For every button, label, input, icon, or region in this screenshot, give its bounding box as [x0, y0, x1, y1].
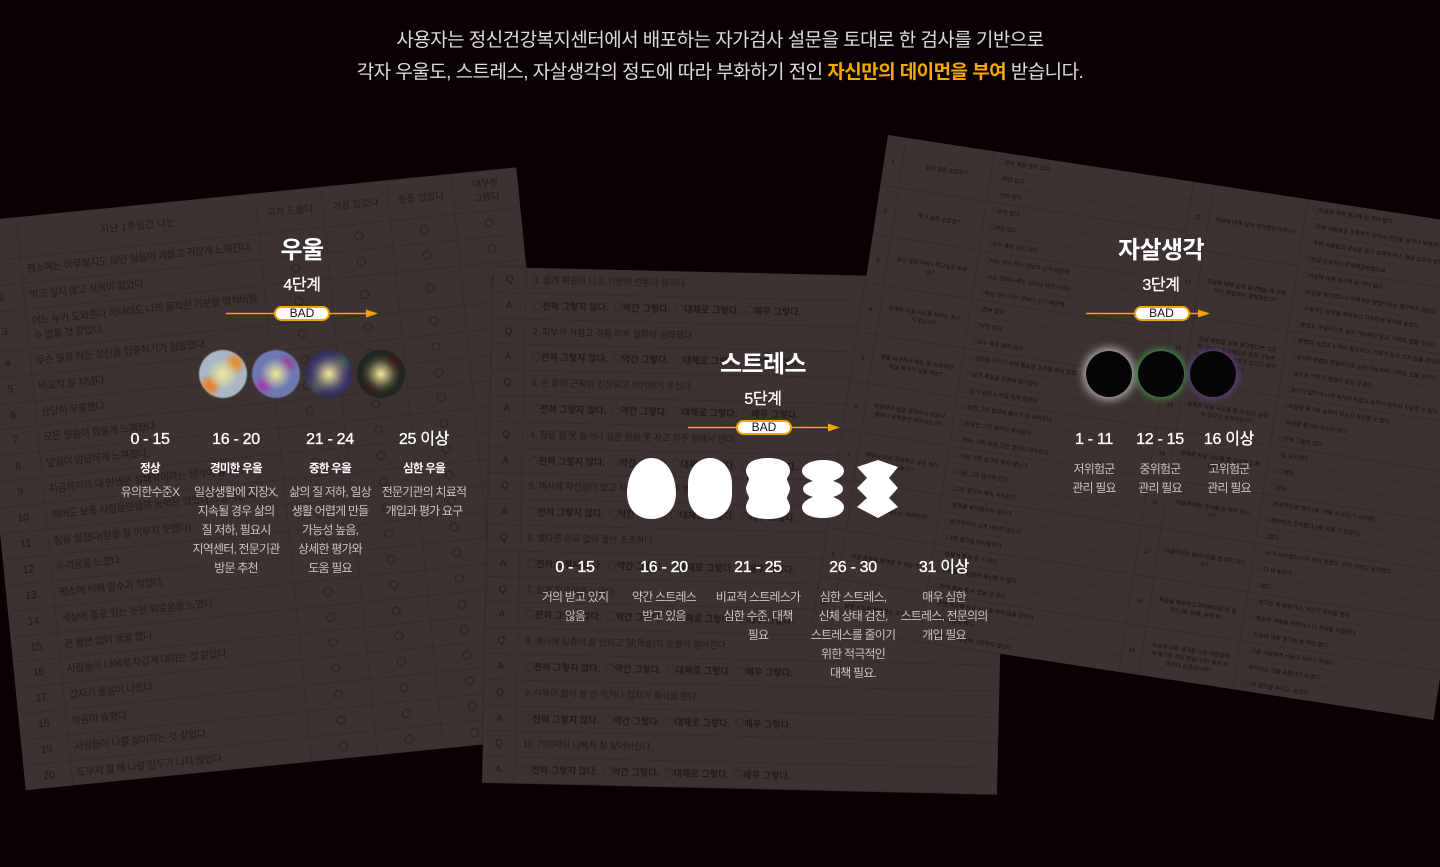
- icon: sphere normal: [199, 350, 247, 398]
- panel: suicidal ideation questionnaire sheet: 자살하려는 글(유서)을 쓴 적이 있는가?: [1164, 547, 1246, 568]
- panel: suicidal ideation questionnaire sheet: ◯주변 때문에 자살 시도를 하지 않을 것이다: [931, 599, 1034, 621]
- panel: suicidal ideation questionnaire sheet: ◯전혀 통제 할 수 없을 것 같다: [934, 582, 1006, 600]
- panel: stress questionnaire sheet: Q: [499, 584, 507, 595]
- panel: stress questionnaire sheet: A: [497, 661, 504, 672]
- panel: depression questionnaire sheet: 16: [32, 666, 45, 679]
- panel: stress questionnaire sheet: A: [500, 558, 507, 569]
- icon: shape egg: [627, 458, 676, 519]
- panel: depression questionnaire sheet: 5: [7, 383, 14, 396]
- score column: 0-15: 않음: [565, 609, 585, 623]
- score column: 21-25: 21 - 25: [734, 559, 782, 576]
- panel: depression questionnaire sheet: 상당히 우울했다.: [41, 401, 107, 418]
- panel: suicidal ideation questionnaire sheet: 8: [839, 501, 843, 508]
- panel: suicidal ideation questionnaire sheet: 살고 싶은 이유 / 죽고싶은 이유는?: [896, 255, 968, 276]
- icon: shape deep bumps: [802, 460, 844, 518]
- score column: 0-15: [121, 431, 180, 499]
- panel: suicidal ideation questionnaire sheet: 13: [1175, 344, 1182, 351]
- panel: suicidal ideation questionnaire sheet: ◯방법이 시간과 노력이 필요하고, 기회가 쉽게 오지 않을 것이다: [1292, 337, 1440, 366]
- score column: 16+: 고위험군: [1209, 462, 1249, 476]
- panel: depression questionnaire sheet: 14: [27, 615, 40, 628]
- panel: stress questionnaire sheet: A: [496, 713, 503, 724]
- panel: suicidal ideation questionnaire sheet: 자살에 대한 준비를 한 적이 있는가?: [1175, 498, 1250, 519]
- panel: suicidal ideation questionnaire sheet: 1: [891, 158, 895, 166]
- panel: depression questionnaire sheet: 12: [22, 563, 34, 576]
- panel: stress questionnaire sheet: Q: [502, 429, 510, 440]
- panel: stress questionnaire sheet: ◯전혀 그렇지 않다. ◯약간 그렇다. ◯대체로 그렇다. ◯매우 그렇다.: [533, 301, 801, 317]
- panel: suicidal ideation questionnaire sheet: 자살하고 싶은 생각이나 소망이 얼마나 오랫동안 지속되는가?: [873, 402, 946, 427]
- panel: suicidal ideation questionnaire sheet: ◯생명을 건지기 위해 필요한 조치를 하지 않겠다: [969, 354, 1082, 378]
- score column: 21-25: 비교적 스트레스가: [716, 590, 800, 604]
- panel: suicidal ideation questionnaire sheet: 9: [831, 550, 835, 557]
- panel: suicidal ideation questionnaire sheet: ◯모두 혹은 많이 있다: [971, 338, 1023, 352]
- panel: stress questionnaire sheet: ◯전혀 그렇지 않다. ◯약간 그렇다. ◯대체로 그렇다. ◯매우 그렇다.: [525, 662, 793, 678]
- score column: 1-11: 저위험군: [1074, 462, 1114, 476]
- panel: depression questionnaire sheet: 4: [4, 357, 11, 370]
- panel: suicidal ideation questionnaire sheet: ◯그런 생각을 받아들인다: [941, 533, 1002, 549]
- score column: 1-11: [1072, 431, 1116, 495]
- panel: stress questionnaire sheet: ◯전혀 그렇지 않다. ◯약간 그렇다. ◯대체로 그렇다. ◯매우 그렇다.: [523, 713, 792, 730]
- panel: suicidal ideation questionnaire sheet: ◯통제할 수 있을지 확신할 수 없다: [936, 566, 1017, 585]
- score column: 26-30: 위한 적극적인: [821, 647, 885, 661]
- panel: depression questionnaire sheet: 대부분: [472, 177, 499, 191]
- badge: BAD: BAD: [290, 306, 314, 320]
- panel: suicidal ideation questionnaire sheet: 5: [861, 354, 865, 361]
- score column: 26-30: 대책 필요.: [830, 666, 876, 680]
- score column: 21-24: [289, 431, 372, 575]
- panel: stress questionnaire sheet: Q: [506, 274, 514, 285]
- panel: depression questionnaire sheet: 적어도 보통 사람들만큼의 능력은 있었다고 생각한다.: [51, 490, 257, 521]
- score column: 0-15: [542, 559, 608, 623]
- score column: 16-20: 방문 추천: [214, 561, 258, 575]
- arrow: depression severity: [226, 310, 378, 318]
- panel: stress questionnaire sheet: ◯전혀 그렇지 않다. ◯약간 그렇다. ◯대체로 그렇다. ◯매우 그렇다.: [528, 507, 797, 523]
- panel: depression questionnaire sheet: 수 없을 것 같았다.: [33, 324, 104, 342]
- panel: depression questionnaire sheet: 3: [1, 326, 8, 338]
- panel: depression questionnaire sheet: 평소에 비해 말수가 적었다.: [59, 577, 165, 599]
- panel: stress questionnaire sheet: Q: [496, 687, 504, 698]
- score column: 16-20: 지역센터, 전문기관: [192, 542, 280, 556]
- panel: stress questionnaire sheet: ◯전혀 그렇지 않다. ◯약간 그렇다. ◯대체로 그렇다. ◯매우 그렇다.: [532, 352, 800, 369]
- score column: 21-24: 21 - 24: [306, 431, 354, 448]
- panel: suicidal ideation questionnaire sheet: ◯한동안 그런 생각이 계속된다: [959, 419, 1031, 437]
- panel: suicidal ideation questionnaire sheet: ◯삶과 죽음을 운명에 맡기겠다: [966, 370, 1039, 388]
- score column: 31+: 매우 심한: [922, 590, 966, 604]
- level count: suicidal ideation: 3단계: [1142, 277, 1180, 294]
- panel: stress questionnaire sheet: 6. 별다른 이유 없이 불안 초조하다.: [528, 533, 655, 546]
- panel: suicidal ideation questionnaire sheet: ◯없다: [1255, 581, 1272, 590]
- panel: suicidal ideation questionnaire sheet: ◯잘 모르겠다: [1275, 451, 1309, 462]
- panel: depression questionnaire sheet: 지난 1주일간 나는: [100, 218, 176, 236]
- panel: suicidal ideation questionnaire sheet: ◯용기가 없어서 나약 해져서 두렵고 능력이 없어서 자살할 수 없다: [1285, 386, 1438, 416]
- score column: 12-15: 관리 필요: [1138, 481, 1182, 495]
- score column: 25+: [382, 430, 466, 518]
- panel: suicidal ideation questionnaire sheet: 자살에 대해 깊게 생각했을 때 구체적인 방법까지 계획했는가?: [1206, 278, 1287, 303]
- panel: suicidal ideation questionnaire sheet: ◯확실한 계획을 세웠거나 다 정리를 마쳤었다: [1250, 614, 1356, 637]
- score column: 16-20: 질 저하, 필요시: [201, 523, 271, 537]
- score column: 21-24: 가능성 높음,: [302, 523, 358, 537]
- panel: suicidal ideation questionnaire sheet: ◯쓰기 시작했으나 다 쓰지 못했다. 단지 쓰려고 생각했다: [1260, 549, 1391, 575]
- panel: suicidal ideation questionnaire sheet: ◯가끔 그런 생각이 든다: [951, 468, 1009, 483]
- score column: 16-20: 경미한 우울: [210, 463, 262, 475]
- score column: 0-15: 정상: [140, 463, 160, 475]
- panel: suicidal ideation questionnaire sheet: ◯그렇다: [1272, 467, 1294, 477]
- panel: stress questionnaire sheet: [482, 267, 1009, 795]
- icons: white morphing shapes: [627, 458, 898, 519]
- arrow: stress severity: [688, 424, 840, 432]
- panel: stress questionnaire sheet: A: [495, 764, 502, 775]
- score column: 1-11: 1 - 11: [1075, 431, 1113, 448]
- panel: stress questionnaire sheet: ◯전혀 그렇지 않다. ◯약간 그렇다. ◯대체로 그렇다. ◯매우 그렇다.: [526, 610, 794, 626]
- panel: stress questionnaire sheet: 9. 식욕이 없어 잘 안 먹거나 갑자기 폭식을 한다.: [524, 688, 699, 702]
- panel: depression questionnaire sheet: 20: [43, 769, 55, 782]
- panel: stress questionnaire sheet: A: [506, 300, 513, 311]
- score column: 25+: 전문기관의 치료적: [382, 485, 466, 499]
- score column: 0-15: 0 - 15: [555, 559, 595, 576]
- panel: suicidal ideation questionnaire sheet: ◯충분히 통제 할 수 있다: [939, 550, 998, 565]
- score column: 26-30: [811, 559, 895, 680]
- score column: 26-30: 심한 스트레스,: [820, 590, 886, 604]
- panel: suicidal ideation questionnaire sheet: ◯약간 있다: [996, 174, 1025, 185]
- panel: stress questionnaire sheet: A: [498, 610, 505, 621]
- panel: depression questionnaire sheet: 17: [35, 692, 47, 705]
- score column: 21-25: 필요: [748, 628, 768, 642]
- panel: depression questionnaire sheet: 6: [9, 409, 16, 421]
- panel: stress questionnaire sheet: 4. 잠을 잘 못 들거나 깊은 잠을 못 자고 자주 잠에서 깬다.: [530, 430, 736, 444]
- panel: suicidal ideation questionnaire sheet: 자살에 대해 깊게 생각했던 이유는?: [1215, 216, 1297, 235]
- panel: suicidal ideation questionnaire sheet: ◯완전하게 준비했다 (예: 약을 다 모았다): [1265, 516, 1361, 537]
- panel: suicidal ideation questionnaire sheet: 자살 충동을 통제할 수 있는가?: [851, 553, 922, 570]
- score column: 16-20: 받고 있음: [642, 609, 686, 623]
- score column: 1-11: 관리 필요: [1072, 481, 1116, 495]
- panel: suicidal ideation questionnaire sheet: ◯생각한 방법이 현실적으로 실천 가능하며, 기회도 있을 것이다: [1290, 353, 1437, 382]
- panel: suicidal ideation questionnaire sheet: 실제로 자살 시도를 할 것이라고 확신하는가?: [1180, 449, 1260, 472]
- panel: stress questionnaire sheet: Q: [501, 481, 509, 492]
- panel: depression questionnaire sheet: 잠을 설쳤다(잠을 잘 이루지 못했다).: [53, 522, 194, 547]
- panel: suicidal ideation questionnaire sheet: ◯모두 혹은 많이 있다: [986, 240, 1038, 254]
- heading: suicidal ideation: 자살생각: [1118, 237, 1204, 264]
- panel: depression questionnaire sheet: 종종 있었다: [397, 191, 445, 206]
- panel: stress questionnaire sheet: ◯전혀 그렇지 않다. ◯약간 그렇다. ◯대체로 그렇다. ◯매우 그렇다.: [522, 765, 791, 781]
- panel: depression questionnaire sheet: 8: [14, 460, 21, 473]
- score column: 16-20: 약간 스트레스: [632, 590, 696, 604]
- score column: 26-30: 신체 상태 검진,: [818, 609, 888, 623]
- panel: depression questionnaire sheet: 15: [30, 640, 42, 654]
- panel: suicidal ideation questionnaire sheet: ◯사는 것이나 죽는 것이나 마찬가지다: [981, 272, 1071, 293]
- score column: 25+: 개입과 평가 요구: [386, 504, 462, 518]
- panel: suicidal ideation questionnaire sheet: ◯자살할 용기와 자신이 있다: [1280, 418, 1347, 435]
- score column: 0-15: 유의한수준X: [121, 485, 179, 499]
- icon: shape soft bumps: [746, 458, 790, 519]
- heading: stress: 스트레스: [720, 351, 806, 378]
- panel: suicidal ideation questionnaire sheet: ◯가족, 종교 때문에 고민하지 않는다: [926, 631, 1012, 651]
- heading: depression: 우울: [281, 237, 323, 264]
- panel: suicidal ideation questionnaire sheet: 3: [876, 256, 880, 263]
- panel: suicidal ideation questionnaire sheet: ◯전혀 그렇지 않다: [1277, 435, 1323, 448]
- panel: suicidal ideation questionnaire sheet: ◯전혀 없다: [976, 305, 1005, 316]
- score column: 16-20: 일상생활에 지장X,: [194, 485, 278, 499]
- panel: suicidal ideation questionnaire sheet: ◯행동을 받아들이지 않는다: [946, 501, 1012, 517]
- score column: 21-25: 심한 수준, 대책: [723, 609, 793, 623]
- panel: suicidal ideation questionnaire sheet: 2: [883, 207, 888, 214]
- score column: 26-30: 스트레스를 줄이기: [811, 628, 895, 642]
- score column: 16+: 16 이상: [1204, 431, 1254, 448]
- panel: suicidal ideation questionnaire sheet: 15: [1158, 450, 1166, 457]
- panel: depression questionnaire sheet: 세상에 홀로 있는 듯한 외로움을 느꼈다.: [61, 598, 215, 624]
- badge: BAD: BAD: [1149, 306, 1174, 320]
- panel: stress questionnaire sheet: 5. 매사에 자신감이 없고 자기 비하를 자주 한다.: [529, 481, 701, 495]
- panel: depression questionnaire sheet: 먹고 싶지 않고 식욕이 없었다.: [29, 279, 146, 301]
- panel: suicidal ideation questionnaire sheet: 명을 되구하려 하는 등 소극적인 자살 욕구가 낮을 때는?: [880, 353, 954, 377]
- score column: 21-25: [716, 559, 801, 642]
- panel: suicidal ideation questionnaire sheet: 14: [1166, 401, 1173, 408]
- panel: depression questionnaire sheet: 도무지 뭘 해 나갈 엄두가 나지 않았다.: [77, 753, 224, 779]
- panel: suicidal ideation questionnaire sheet: ◯자살에 대해 생각해 본 적이 없다: [1312, 206, 1393, 225]
- panel: stress questionnaire sheet: Q: [503, 377, 511, 389]
- panel: suicidal ideation questionnaire sheet: ◯전혀 없다: [991, 207, 1020, 218]
- panel: stress questionnaire sheet: A: [503, 403, 510, 414]
- panel: suicidal ideation questionnaire sheet: ◯자살에 대해 생각해 본 적이 없다: [1247, 630, 1328, 649]
- panel: depression questionnaire sheet: 사람들이 나를 싫어하는 것 같았다.: [74, 729, 209, 753]
- panel: stress questionnaire sheet: 3. 온 몸의 근육이 긴장되고 여기저기 쑤신다.: [531, 378, 693, 392]
- icon: shape capsule: [688, 458, 732, 519]
- panel: suicidal ideation questionnaire sheet: ◯양가적이나 크게 개의치 않는다: [944, 517, 1022, 535]
- panel: depression questionnaire sheet: 18: [37, 718, 50, 731]
- panel: suicidal ideation questionnaire sheet: 죽고 싶은 소망은?: [917, 212, 960, 226]
- panel: stress questionnaire sheet: A: [501, 506, 508, 518]
- score column: 16+: [1204, 430, 1254, 495]
- panel: stress questionnaire sheet: ◯전혀 그렇지 않다. ◯약간 그렇다. ◯대체로 그렇다. ◯매우 그렇다.: [529, 455, 798, 472]
- panel: suicidal ideation questionnaire sheet: ◯전혀 없다: [994, 191, 1022, 202]
- level count: stress: 5단계: [744, 391, 782, 408]
- score column: 16+: 관리 필요: [1207, 481, 1251, 495]
- panel: depression questionnaire sheet: [0, 167, 573, 790]
- panel: suicidal ideation questionnaire sheet: ◯거의 그런 생각이 들지 않는다: [954, 452, 1028, 470]
- panel: depression questionnaire sheet: 그랬다: [473, 191, 500, 205]
- score column: 21-24: 생활 어렵게 만들: [292, 504, 368, 518]
- intro text: 사용자는 정신건강복지센터에서 배포하는 자가검사 설문을 토대로 한 검사를 기반으로: [396, 30, 1044, 51]
- arrow: suicide severity: [1086, 310, 1210, 318]
- intro text: [357, 30, 1083, 83]
- score column: 12-15: [1136, 431, 1184, 495]
- panel: depression questionnaire sheet: 앞일이 암담하게 느껴졌다.: [46, 449, 149, 470]
- panel: depression questionnaire sheet: 비교적 잘 지냈다.: [38, 375, 107, 393]
- intro text: 각자 우울도, 스트레스, 자살생각의 정도에 따라 부화하기 전인 자신만의 데이먼을 부여 받습니다.: [357, 62, 1083, 83]
- score column: 12-15: 12 - 15: [1136, 431, 1184, 448]
- level count: depression: 4단계: [283, 277, 321, 294]
- score column: 31+: 개입 필요: [922, 628, 966, 642]
- panel: depression questionnaire sheet: 10: [17, 512, 29, 525]
- panel: suicidal ideation questionnaire sheet: ◯다른 사람에게 터놓고 이야기 하였다: [1245, 647, 1334, 667]
- panel: depression questionnaire sheet: 19: [40, 744, 52, 757]
- icon: shape zigzag: [857, 460, 898, 518]
- panel: suicidal ideation questionnaire sheet: ◯그런 생각이 계속 지속된다: [949, 484, 1016, 501]
- score column: 21-24: 삶의 질 저하, 일상: [289, 485, 371, 499]
- panel: suicidal ideation questionnaire sheet: 16: [1151, 499, 1158, 506]
- panel: suicidal ideation questionnaire sheet: 실제로 자살 시도를 하려는 욕구가 있는가?: [888, 304, 961, 326]
- score column: 31+: [900, 558, 988, 642]
- panel: suicidal ideation questionnaire sheet: ◯방법도 현실적으로 실천 가능하지 않고, 기회도 없을 것이다: [1295, 320, 1437, 349]
- score column: 16-20: 16 - 20: [640, 559, 688, 576]
- panel: suicidal ideation questionnaire sheet: 자살 방법을 실제 생각했다면 그것이 얼마나 현실적으로 실천 가능하며, 또한 시도할 기회가 있다고 생각하는가?: [1194, 335, 1277, 373]
- panel: depression questionnaire sheet: 평소에는 아무렇지도 않던 일들이 괴롭고 귀찮게 느껴진다.: [26, 242, 253, 275]
- panel: stress questionnaire sheet: 10. 기억력이 나빠져 잘 잊어버린다.: [523, 739, 653, 752]
- panel: suicidal ideation questionnaire sheet: ◯자살할 용기와 능력이 있는지 확신할 수 없다: [1282, 402, 1390, 425]
- panel: stress questionnaire sheet: Q: [504, 326, 513, 337]
- score column: 21-24: 중한 우울: [309, 463, 351, 475]
- panel: suicidal ideation questionnaire sheet: 10: [822, 599, 829, 606]
- panel: suicidal ideation questionnaire sheet: ◯죽는 것이 사는 것보다 낫기 때문에: [979, 289, 1065, 308]
- icon: sphere severe: [357, 350, 405, 398]
- panel: depression questionnaire sheet: 어느 누가 도와준다 하더라도 나의 울적한 기분을 떨쳐버릴: [31, 294, 258, 327]
- score column: 0-15: 거의 받고 있지: [542, 590, 608, 604]
- badge: BAD: BAD: [752, 420, 776, 434]
- panel: suicidal ideation questionnaire sheet: ◯계속, 거의 항상 그런 생각이 지속된다: [956, 435, 1049, 456]
- panel: depression questionnaire sheet: 무슨 일을 하든 정신을 집중하기가 힘들었다.: [35, 339, 207, 367]
- panel: suicidal ideation questionnaire sheet: ◯사는 것이 죽는 것보다 낫기 때문에: [984, 256, 1070, 276]
- panel: suicidal ideation questionnaire sheet: ◯자살에 대해 생각해 본 적이 없다: [1302, 271, 1383, 290]
- score column: 16-20: 16 - 20: [212, 431, 260, 448]
- panel: stress questionnaire sheet: Q: [497, 635, 505, 647]
- panel: suicidal ideation questionnaire sheet: ◯살기 위한 노력을 하지 않겠다: [964, 387, 1038, 404]
- score column: 0-15: 0 - 15: [130, 431, 170, 448]
- badge: BAD: [274, 306, 330, 321]
- panel: suicidal ideation questionnaire sheet: 18: [1136, 596, 1143, 604]
- panel: suicidal ideation questionnaire sheet: ◯약간 걱정이 된다: [929, 615, 974, 628]
- panel: depression questionnaire sheet: 지금까지의 내 인생은 실패작이라는 생각이 들었다.: [48, 465, 246, 496]
- panel: stress questionnaire sheet: 7. 쉽게 피로감을 느낀다.: [526, 584, 616, 596]
- panel: depression questionnaire sheet: 7: [12, 435, 19, 447]
- panel: suicidal ideation questionnaire sheet: [813, 135, 1440, 720]
- score column: 16-20: [632, 559, 696, 623]
- panel: depression questionnaire sheet: 사람들이 나에게 차갑게 대하는 것 같았다.: [66, 649, 229, 676]
- panel: suicidal ideation questionnaire sheet: ◯다 써 놓았다: [1257, 565, 1293, 577]
- panel: depression questionnaire sheet: 9: [17, 486, 24, 499]
- score column: 21-24: 도움 필요: [308, 561, 352, 575]
- score column: 31+: 31 이상: [919, 559, 969, 576]
- score column: 12-15: 중위험군: [1140, 462, 1180, 476]
- panel: suicidal ideation questionnaire sheet: 6: [853, 403, 858, 410]
- panel: stress questionnaire sheet: ◯전혀 그렇지 않다. ◯약간 그렇다. ◯대체로 그렇다. ◯매우 그렇다.: [531, 404, 799, 420]
- score column: 25+: 25 이상: [399, 431, 449, 448]
- panel: depression questionnaire sheet: 11: [20, 537, 31, 550]
- score column: 21-24: 상세한 평가와: [298, 542, 362, 556]
- panel: suicidal ideation questionnaire sheet: 7: [846, 452, 850, 459]
- panel: suicidal ideation questionnaire sheet: ◯모두 혹은 많이 있다: [999, 158, 1051, 173]
- score column: 26-30: 26 - 30: [829, 559, 877, 576]
- panel: suicidal ideation questionnaire sheet: ◯그런 생각을 속이고, 숨겼다: [1240, 679, 1309, 696]
- panel: suicidal ideation questionnaire sheet: 실제 시도를 방해하는 요인은?: [844, 602, 914, 619]
- icon: sphere mild: [252, 350, 300, 398]
- badge: BAD: [736, 420, 792, 435]
- panel: suicidal ideation questionnaire sheet: ◯잠깐 그런 생각이 들다가 곧 사라진다: [961, 403, 1052, 423]
- panel: depression questionnaire sheet: 큰 불만 없이 생활 했다.: [64, 630, 155, 650]
- panel: suicidal ideation questionnaire sheet: 19: [1128, 646, 1136, 653]
- panel: suicidal ideation questionnaire sheet: ◯없다: [1262, 532, 1279, 541]
- score column: 16-20: [192, 431, 280, 575]
- panel: suicidal ideation questionnaire sheet: ◯약간 있다: [989, 223, 1017, 234]
- panel: depression questionnaire sheet: 가끔 있었다: [332, 197, 379, 213]
- panel: stress questionnaire sheet: Q: [500, 532, 508, 543]
- panel: suicidal ideation questionnaire sheet: ◯앞으로 기회가 생겼다 생길 것 같다: [1287, 369, 1373, 389]
- panel: depression questionnaire sheet: 모든 일들이 힘들게 느껴졌다.: [43, 422, 158, 444]
- panel: depression questionnaire sheet: 두려움을 느꼈다.: [56, 555, 123, 573]
- panel: stress questionnaire sheet: A: [504, 352, 511, 363]
- panel: suicidal ideation questionnaire sheet: 자살에 대한 태도는 어떠한가?: [859, 504, 929, 521]
- icon: eclipse white glow: [1086, 351, 1132, 397]
- icon: eclipse green glow: [1138, 351, 1184, 397]
- panel: suicidal ideation questionnaire sheet: ◯자살을 생각했으나 구체적인 방법까지는 생각하지 않았다: [1300, 288, 1437, 315]
- panel: depression questionnaire sheet: 갑자기 울음이 나왔다.: [69, 682, 155, 702]
- panel: stress questionnaire sheet: 2. 피부가 거칠고 각종 피부 질환이 심해졌다.: [532, 327, 694, 340]
- panel: stress questionnaire sheet: A: [502, 455, 509, 466]
- panel: suicidal ideation questionnaire sheet: 자살에 대한 생각을 다른 사람들에게 얘기한 적이 있습니까? 혹은 속이거나 숨겼습니까?: [1150, 641, 1230, 673]
- score column: 25+: 심한 우울: [403, 463, 445, 475]
- panel: stress questionnaire sheet: ◯전혀 그렇지 않다. ◯약간 그렇다. ◯대체로 그렇다. ◯매우 그렇다.: [527, 559, 795, 575]
- panel: stress questionnaire sheet: Q: [495, 738, 503, 750]
- panel: suicidal ideation questionnaire sheet: ◯생각만 해 보았거나, 약간의 정리를 했다: [1252, 598, 1350, 619]
- panel: suicidal ideation questionnaire sheet: 11: [1195, 213, 1202, 221]
- panel: suicidal ideation questionnaire sheet: 얼마나 자주 자살하고 싶은 생각이 드는가?: [865, 451, 939, 473]
- panel: suicidal ideation questionnaire sheet: ◯없다: [1270, 483, 1287, 493]
- panel: suicidal ideation questionnaire sheet: 4: [868, 305, 873, 312]
- panel: suicidal ideation questionnaire sheet: ◯약간 있다: [974, 321, 1002, 332]
- panel: suicidal ideation questionnaire sheet: 17: [1144, 548, 1151, 555]
- panel: depression questionnaire sheet: 마음이 슬펐다.: [71, 711, 129, 727]
- panel: suicidal ideation questionnaire sheet: 살고 싶은 소망은?: [925, 164, 968, 177]
- panel: suicidal ideation questionnaire sheet: ◯현실 도피적인 문제해결방법으로: [1305, 255, 1386, 274]
- score column: 31+: 스트레스, 전문의의: [900, 609, 988, 623]
- icon: eclipse purple glow: [1190, 351, 1236, 397]
- icon: sphere moderate: [305, 350, 353, 398]
- panel: suicidal ideation questionnaire sheet: 12: [1185, 278, 1192, 286]
- panel: stress questionnaire sheet: 8. 매사에 집중이 잘 안되고 일(학습)의 능률이 떨어진다.: [525, 636, 728, 651]
- panel: suicidal ideation questionnaire sheet: ◯부분적으로 했다 (예: 약을 사 모으기 시작함): [1267, 500, 1376, 523]
- panel: suicidal ideation questionnaire sheet: 실제로 자살 시도를 할 수 있는 능력이 있다고 생각하는가?: [1187, 400, 1269, 425]
- panel: depression questionnaire sheet: 극히 드물다: [267, 204, 314, 219]
- panel: stress questionnaire sheet: 1. 쉽게 짜증이 나고 기분의 변동이 심하다.: [534, 275, 688, 288]
- score column: 16-20: 지속될 경우 삶의: [198, 504, 274, 518]
- panel: suicidal ideation questionnaire sheet: 죽음을 예상하고 마지막으로 한 일은? (예: 보험, 유언 등): [1158, 596, 1237, 620]
- badge: BAD: [1134, 306, 1190, 321]
- panel: suicidal ideation questionnaire sheet: ◯주저하는 것을 속였다가 숨겼다: [1242, 663, 1320, 681]
- panel: depression questionnaire sheet: 13: [25, 589, 37, 602]
- panel: suicidal ideation questionnaire sheet: ◯구체적인 방법을 계획하고 자살하게 생각해 놓았다: [1297, 304, 1419, 329]
